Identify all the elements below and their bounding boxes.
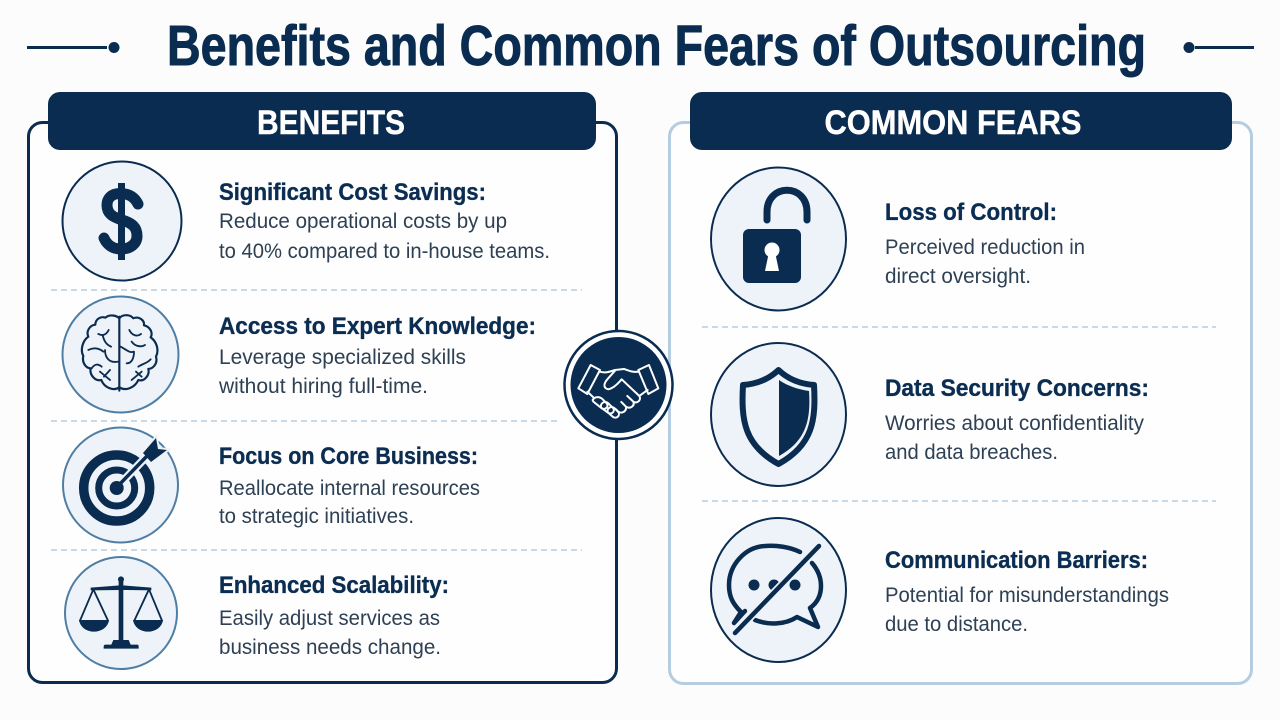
- benefit text: expert knowledge: Access to Expert Knowledge:: [219, 313, 536, 340]
- benefit text: cost savings: Significant Cost Savings:: [219, 179, 486, 206]
- benefit text: core business: [219, 443, 480, 528]
- benefits header: [48, 92, 596, 150]
- benefit text: core business: Reallocate internal resources: [219, 477, 480, 500]
- fear text: loss of control: [885, 199, 1085, 288]
- benefit text: scalability: Easily adjust services as: [219, 607, 440, 630]
- icon: brain: [62, 296, 178, 412]
- benefits header: BENEFITS: [257, 104, 405, 142]
- icon: balance scales: [65, 557, 177, 669]
- benefit text: expert knowledge: Leverage specialized skills: [219, 346, 466, 369]
- fear text: loss of control: direct oversight.: [885, 265, 1031, 288]
- benefit text: expert knowledge: [218, 313, 536, 398]
- fear text: communication barriers: due to distance.: [885, 613, 1028, 636]
- benefit text: cost savings: to 40% compared to in-house teams.: [219, 240, 550, 263]
- benefit text: cost savings: [219, 179, 550, 263]
- panel: common fears: [670, 92, 1252, 684]
- benefit text: cost savings: Reduce operational costs by up: [219, 210, 507, 233]
- fear text: data security: and data breaches.: [885, 441, 1058, 464]
- icon: crossed-out speech bubble: [711, 518, 846, 662]
- benefit text: scalability: [219, 572, 449, 659]
- icon: half-filled shield: [711, 343, 846, 486]
- fear text: communication barriers: [885, 547, 1169, 636]
- benefit text: expert knowledge: without hiring full-time.: [218, 375, 428, 398]
- fear text: data security: [885, 375, 1149, 464]
- fear text: communication barriers: Communication Barriers:: [885, 547, 1148, 574]
- icon: dollar sign: [62, 162, 182, 280]
- icon: open padlock: [711, 168, 846, 310]
- fear text: loss of control: Loss of Control:: [885, 199, 1057, 226]
- fear text: communication barriers: Potential for misunderstandings: [885, 584, 1169, 607]
- benefit text: scalability: Enhanced Scalability:: [219, 572, 449, 599]
- fear text: data security: Data Security Concerns:: [885, 375, 1149, 402]
- icon: target with arrow: [63, 428, 178, 542]
- fears header: COMMON FEARS: [824, 104, 1082, 142]
- fear text: loss of control: Perceived reduction in: [885, 236, 1085, 259]
- panel: benefits: [28, 92, 616, 682]
- right title ornament: [1184, 42, 1254, 53]
- benefit text: core business: to strategic initiatives.: [219, 505, 414, 528]
- benefit text: scalability: business needs change.: [219, 636, 441, 659]
- icon: central handshake badge: [564, 331, 672, 439]
- left title ornament: [27, 42, 120, 53]
- benefit text: core business: Focus on Core Business:: [219, 443, 478, 470]
- fears header: [690, 92, 1232, 150]
- fear text: data security: Worries about confidentiality: [885, 412, 1144, 435]
